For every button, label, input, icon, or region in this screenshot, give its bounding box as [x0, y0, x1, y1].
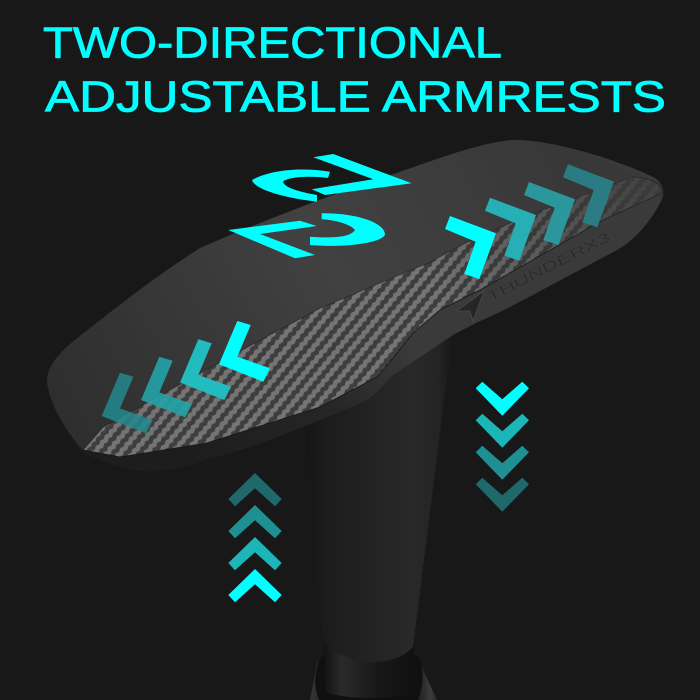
right chevrons	[445, 164, 614, 279]
title: ADJUSTABLE ARMRESTS	[45, 72, 666, 122]
top surface	[47, 140, 633, 450]
brand name: THUNDERX3	[484, 229, 613, 305]
rotate arrow lower	[228, 213, 385, 258]
down chevrons	[476, 382, 529, 512]
carbon shading	[430, 177, 662, 310]
brand logo	[457, 291, 484, 321]
armrest pad	[47, 140, 663, 471]
title	[43, 18, 666, 122]
title: TWO-DIRECTIONAL	[43, 18, 502, 68]
carbon fibre strip	[83, 177, 662, 457]
armrest post	[304, 335, 453, 700]
rotate arrow upper	[252, 154, 412, 202]
left chevrons	[102, 321, 270, 433]
up chevrons	[228, 473, 282, 602]
